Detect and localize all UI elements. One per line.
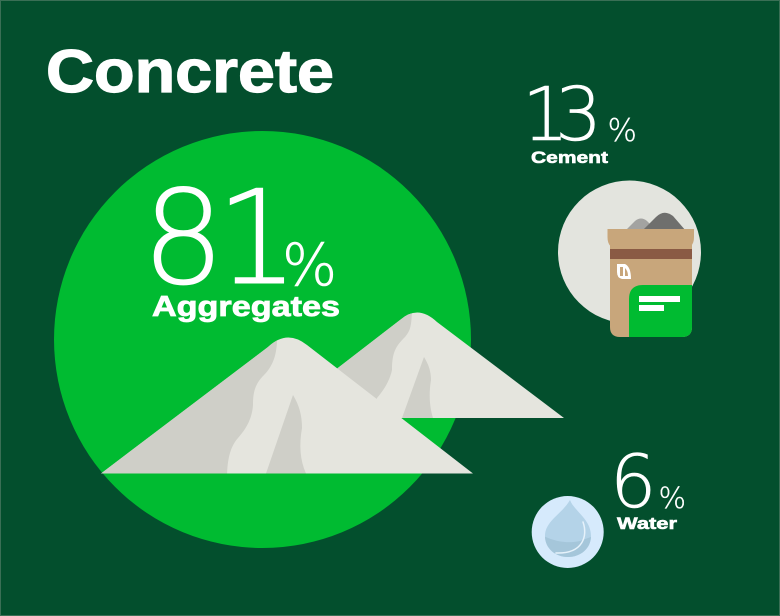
label: water: Water <box>617 514 677 533</box>
green circle <box>54 131 471 548</box>
stat: 81 percent: 81 <box>142 162 299 314</box>
stat: 13 percent <box>522 72 637 158</box>
green label <box>629 285 692 337</box>
stat: 81 percent: % <box>282 231 337 299</box>
stat: 13 percent: 13 <box>522 72 602 158</box>
stat: 6 percent <box>610 440 686 525</box>
back pile <box>337 312 564 418</box>
stat: 13 percent: % <box>608 113 637 149</box>
stat: 6 percent: % <box>658 481 686 515</box>
icon: cement bag <box>558 180 701 337</box>
panel: aggregates <box>54 131 564 548</box>
icon: aggregate piles <box>101 312 564 474</box>
front pile <box>101 338 473 474</box>
label: aggregates: Aggregates <box>152 291 340 323</box>
title: Concrete <box>46 38 334 105</box>
panel: water <box>532 452 684 568</box>
bag logo <box>617 264 631 279</box>
icon: water drop <box>532 496 604 568</box>
label: cement: Cement <box>531 148 608 167</box>
stat: 6 percent: 6 <box>610 440 656 525</box>
panel: cement <box>522 72 701 337</box>
